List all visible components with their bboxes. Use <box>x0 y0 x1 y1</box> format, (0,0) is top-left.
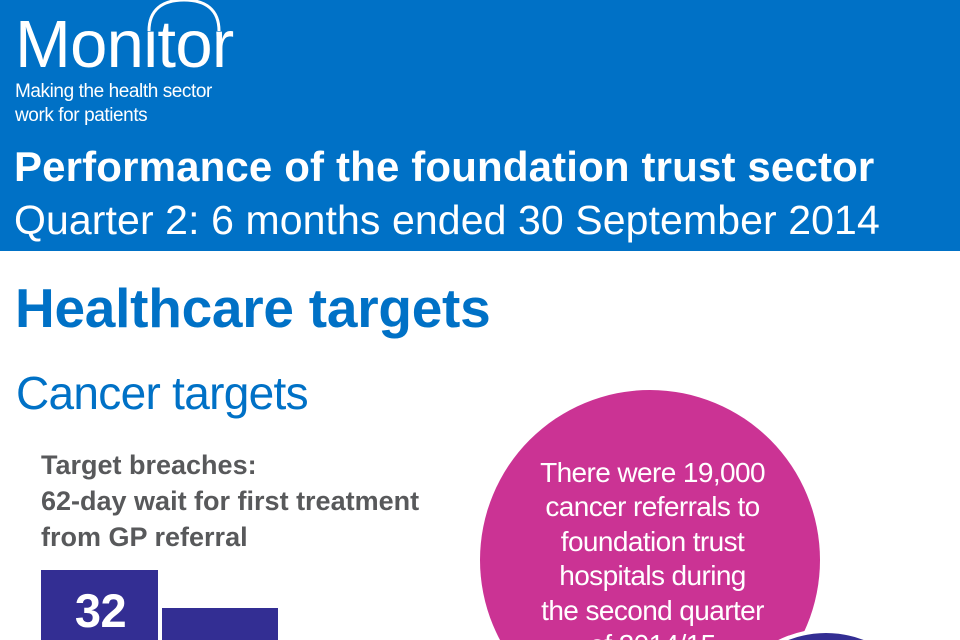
tagline <box>15 81 212 126</box>
callout text <box>540 457 765 640</box>
callout text: foundation trust <box>561 526 744 557</box>
callout text: There were 19,000 <box>540 457 765 488</box>
chart heading: target breaches: 62-day wait for first treatment <box>41 486 419 516</box>
logo: Monitor <box>15 0 234 82</box>
tagline: Making the health sector <box>15 81 212 102</box>
bar: second period <box>162 608 278 640</box>
callout text: hospitals during <box>559 560 746 591</box>
logo wordmark: Monitor <box>15 7 234 82</box>
bar value: 32: 32 <box>75 584 126 637</box>
report subtitle: Quarter 2: 6 months ended 30 September 2014 <box>14 197 880 243</box>
callout text: the second quarter <box>541 595 764 626</box>
logo arch <box>148 0 220 31</box>
bar chart <box>41 570 278 640</box>
callout: cancer referrals <box>480 390 820 640</box>
tagline: work for patients <box>15 105 147 126</box>
chart heading: target breaches <box>41 450 419 552</box>
magenta circle <box>480 390 820 640</box>
subheading: Cancer targets: Cancer targets <box>16 367 308 419</box>
heading: Healthcare targets: Healthcare targets <box>15 277 490 339</box>
report title: Performance of the foundation trust sector <box>14 143 874 190</box>
navy circle with white ring <box>778 631 864 640</box>
chart heading: target breaches: from GP referral <box>41 522 248 552</box>
bar: 32 breaches <box>41 570 158 640</box>
callout text: cancer referrals to <box>545 491 760 522</box>
header band <box>0 0 960 251</box>
chart heading: target breaches: Target breaches: <box>41 450 257 480</box>
